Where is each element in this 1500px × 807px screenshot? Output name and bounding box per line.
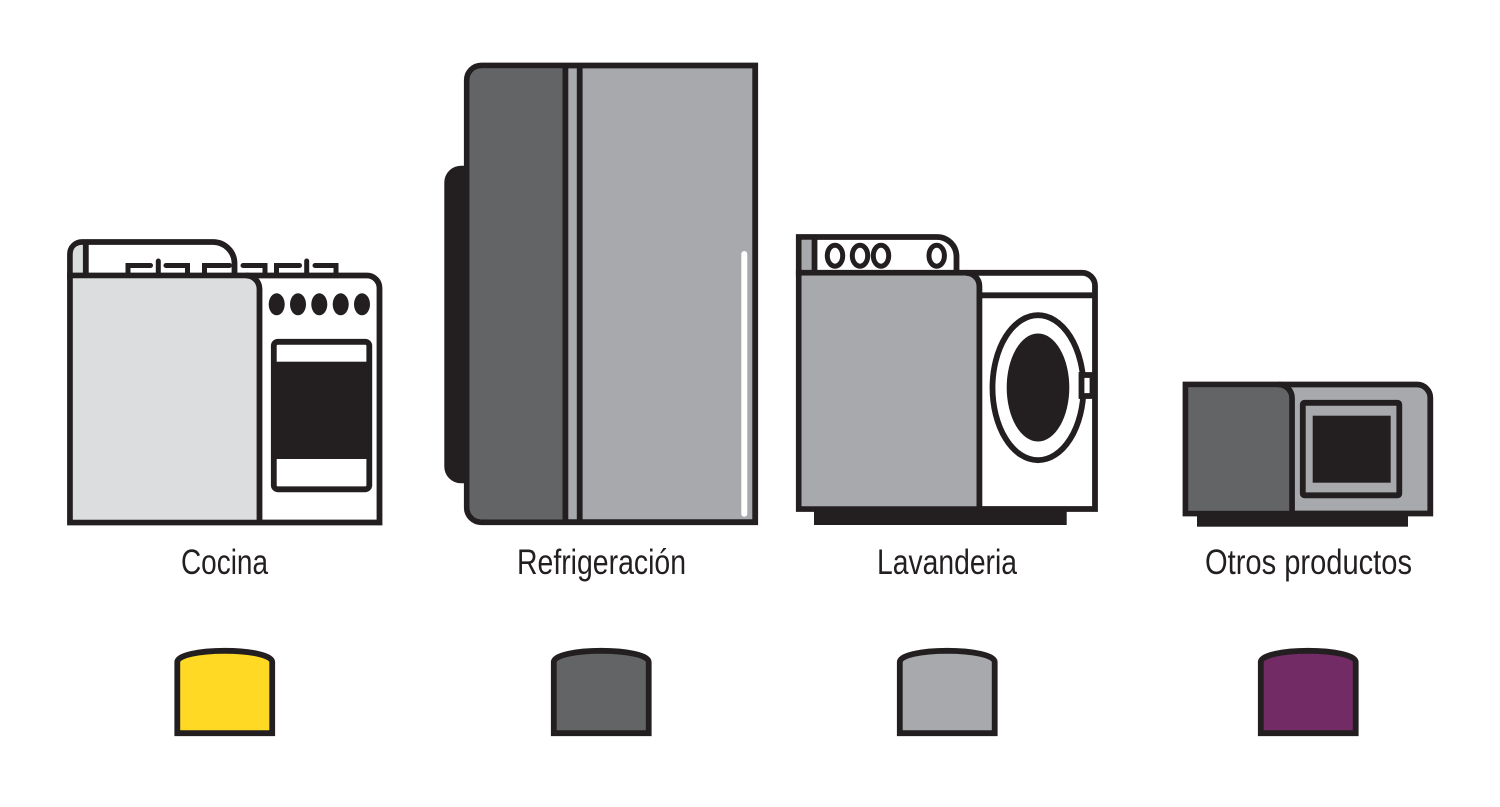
label: Cocina: Cocina	[181, 543, 268, 582]
legend swatch: dark grey	[554, 651, 649, 733]
legend swatch: light grey	[900, 651, 995, 733]
icon: washing machine (Lavanderia)	[799, 237, 1095, 525]
legend swatch: yellow	[177, 651, 272, 733]
label: Refrigeración: Refrigeración	[517, 543, 686, 582]
icon: microwave (Otros productos)	[1186, 384, 1430, 527]
icon: kitchen stove (Cocina)	[70, 242, 380, 522]
label: Otros productos: Otros productos	[1205, 543, 1412, 582]
icon: refrigerator (Refrigeración)	[444, 66, 755, 522]
legend swatch: purple	[1261, 651, 1356, 733]
label: Lavanderia: Lavanderia	[877, 543, 1017, 582]
